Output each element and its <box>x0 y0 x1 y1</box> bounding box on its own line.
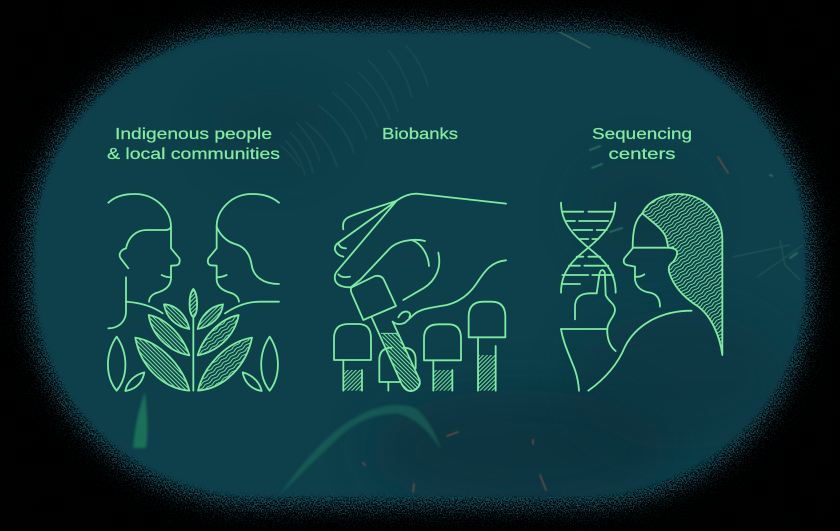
specks <box>363 30 803 492</box>
vial <box>351 276 420 391</box>
icon: two faces with plant <box>108 194 279 391</box>
heading: Sequencing centers: Sequencing <box>592 126 692 143</box>
scientist <box>588 194 722 391</box>
heading: Indigenous people & local communities: Indigenous people <box>115 126 272 143</box>
icon: DNA helix and scientist <box>561 194 722 391</box>
plant <box>108 289 278 391</box>
grass blade <box>280 405 441 495</box>
background: forest foliage <box>133 30 803 510</box>
hand <box>335 194 506 324</box>
right person <box>208 194 279 313</box>
DNA helix <box>561 203 616 293</box>
background: teal pill <box>35 33 805 496</box>
heading: Indigenous people & local communities: & local communities <box>107 146 280 163</box>
heading: Sequencing centers <box>592 126 692 163</box>
left person <box>108 194 180 328</box>
heading: Sequencing centers: centers <box>608 146 676 163</box>
sample tubes <box>334 302 505 391</box>
heading: Indigenous people & local communities <box>107 126 280 163</box>
heading: Biobanks: Biobanks <box>382 126 458 143</box>
fern fronds <box>280 45 428 175</box>
icon: hand holding sample vial above sample tubes <box>334 194 506 391</box>
gloved hand <box>561 270 616 391</box>
